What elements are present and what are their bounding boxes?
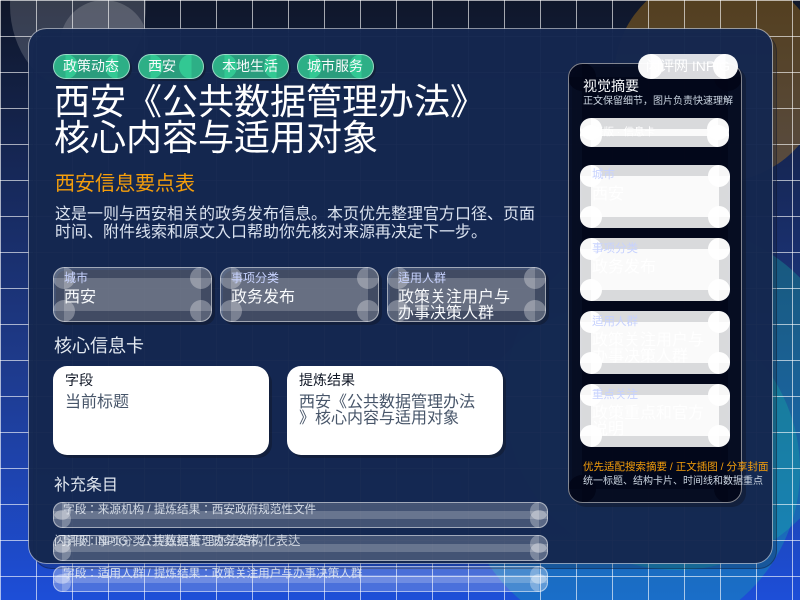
side panel: visual summary — [568, 63, 769, 507]
side panel subheading: 正文保留细节，图片负责快速理解 — [583, 94, 733, 107]
preview tile: 适用人群: 办事决策人群 — [592, 347, 688, 365]
side panel footer note: 统一标题、结构卡片、时间线和数据重点 — [583, 474, 763, 487]
section heading: 补充条目: 补充条目 — [54, 476, 118, 494]
info card: 字段: 字段 — [65, 372, 93, 388]
preview tile: 城市 — [580, 165, 730, 228]
list item: 来源机构: 字段：来源机构 / 提炼结果：西安政府规范性文件 — [63, 502, 317, 516]
title: 核心内容与适用对象 — [54, 117, 378, 158]
preview strip: 信息卡: 竖版 · 信息卡 — [593, 125, 655, 138]
preview tile: 重点关注: 政策重点和官方 — [592, 404, 704, 422]
list item: 适用人群: 字段：适用人群 / 提炼结果：政策关注用户与办事决策人群 — [63, 566, 363, 580]
tag: 政策动态: 政策动态 — [63, 58, 119, 74]
tag: 本地生活 — [212, 54, 291, 81]
preview tile: 事项分类: 事项分类 — [592, 241, 638, 255]
intro paragraph: 这是一则与西安相关的政务发布信息。本页优先整理官方口径、页面 — [55, 205, 535, 223]
tag: 政策动态 — [53, 54, 132, 81]
metric card: 城市: 西安 — [64, 288, 96, 306]
tag: 城市服务: 城市服务 — [307, 58, 363, 74]
tag: 西安: 西安 — [148, 58, 176, 74]
preview tile: 事项分类 — [580, 238, 730, 301]
subtitle: 西安信息要点表 — [55, 172, 195, 195]
list item: 适用人群 — [53, 566, 548, 592]
info card: 提炼结果: 西安《公共数据管理办法 — [299, 393, 475, 411]
metric card: 城市 — [53, 267, 215, 325]
info card: 字段: 当前标题 — [65, 393, 129, 411]
side panel orange note: 优先适配搜索摘要 / 正文插图 / 分享封面 — [583, 460, 769, 473]
metric card: 适用人群 — [387, 267, 549, 325]
metric card: 城市: 城市 — [64, 271, 88, 285]
preview tile: 事项分类: 政务发布 — [592, 258, 656, 276]
list item: 事项分类 — [53, 534, 548, 561]
preview tile: 重点关注: 说明 — [592, 420, 624, 438]
brand badge: 闪评网 INPIG — [646, 58, 730, 74]
preview tile: 城市: 城市 — [592, 168, 615, 181]
side panel heading: 视觉摘要 — [583, 78, 639, 94]
preview tile: 适用人群 — [580, 311, 730, 374]
preview strip: 信息卡 — [580, 118, 729, 147]
preview tile: 重点关注 — [580, 384, 730, 447]
title: 西安《公共数据管理办法》 — [54, 81, 486, 122]
preview tile: 适用人群: 适用人群 — [592, 314, 638, 328]
metric card: 事项分类 — [220, 267, 382, 325]
intro paragraph: 时间、附件线索和原文入口帮助你先核对来源再决定下一步。 — [55, 223, 487, 241]
tag: 西安 — [138, 54, 206, 81]
brand badge — [638, 54, 738, 79]
info card: 提炼结果 — [287, 366, 506, 458]
metric card: 适用人群: 办事决策人群 — [398, 304, 494, 322]
metric card: 适用人群: 适用人群 — [398, 271, 446, 285]
tag: 本地生活: 本地生活 — [222, 58, 278, 74]
preview tile: 适用人群: 政策关注用户与 — [592, 331, 704, 349]
footer source line: 闪评网 INPIG · 公共数据管理办法结构化表达 — [54, 533, 300, 548]
preview tile: 重点关注: 重点关注 — [592, 387, 638, 401]
section heading: 核心信息卡: 核心信息卡 — [54, 336, 144, 356]
info card: 字段 — [53, 366, 272, 458]
metric card: 事项分类: 政务发布 — [231, 288, 295, 306]
tag: 城市服务 — [297, 54, 376, 81]
list item: 事项分类: 字段：事项分类 / 提炼结果：政务发布 — [63, 534, 258, 548]
preview tile: 城市: 西安 — [592, 185, 624, 203]
info card: 提炼结果: 提炼结果 — [299, 372, 355, 388]
list item: 来源机构 — [53, 502, 548, 528]
info card: 提炼结果: 》核心内容与适用对象 — [299, 409, 459, 427]
metric card: 事项分类: 事项分类 — [231, 270, 279, 285]
metric card: 适用人群: 政策关注用户与 — [398, 288, 510, 306]
